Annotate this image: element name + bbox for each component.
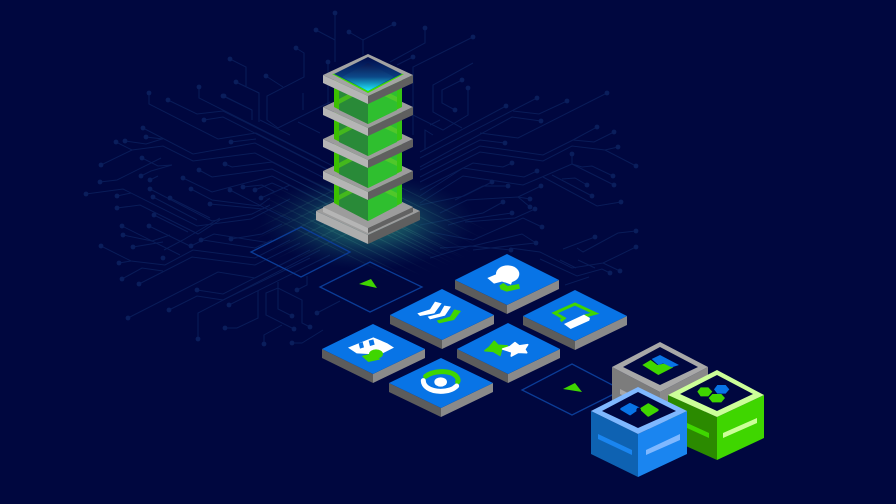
icon: hexagons xyxy=(697,385,729,402)
screen outer xyxy=(334,57,402,91)
slab 3 xyxy=(323,118,413,168)
cube: green xyxy=(668,370,764,460)
screen inner xyxy=(342,63,394,91)
outlined slot with green arrow lower xyxy=(522,364,622,415)
green rim xyxy=(332,70,404,93)
slab 4 xyxy=(323,150,413,200)
grey cube side bar xyxy=(620,389,634,401)
column section 2 xyxy=(334,107,402,156)
green cube left bar xyxy=(687,423,709,438)
tile: chevrons xyxy=(390,289,494,349)
traces: left xyxy=(86,82,368,344)
tile: stars xyxy=(457,323,560,383)
icon: envelope xyxy=(642,355,679,375)
glow light lines xyxy=(264,178,472,270)
outlined slot with green arrow xyxy=(320,262,422,312)
cube: blue xyxy=(591,387,687,477)
icon: puzzle xyxy=(622,404,657,415)
column section 3 xyxy=(334,139,402,188)
column section 4 xyxy=(334,171,402,221)
icon: monitor xyxy=(555,304,595,329)
icon: disk with person xyxy=(348,337,394,362)
tile: monitor xyxy=(523,290,627,350)
arrow: green xyxy=(359,279,377,288)
cube: grey xyxy=(612,342,708,435)
server tower xyxy=(316,54,420,244)
green cube right bar xyxy=(723,418,757,438)
top slab xyxy=(323,54,413,104)
tile: user check xyxy=(455,254,559,314)
blue cube right bar xyxy=(646,434,680,455)
column section 1 xyxy=(334,75,402,124)
illustration xyxy=(84,10,764,477)
base upper tier xyxy=(323,186,413,233)
traces: right xyxy=(420,93,636,285)
circuit board traces xyxy=(84,11,638,346)
trace end dots xyxy=(84,11,638,346)
icon: user xyxy=(487,265,520,292)
icon: ring arrows xyxy=(423,372,458,391)
tile: disk xyxy=(322,324,425,383)
traces: top xyxy=(223,13,473,150)
arrow: green lower xyxy=(563,383,582,392)
outlined empty slot xyxy=(251,227,350,277)
icon: stars xyxy=(485,341,528,356)
icon: chevrons xyxy=(417,302,461,323)
tile: ring xyxy=(389,358,493,417)
slab 2 xyxy=(323,86,413,136)
base lower tier xyxy=(316,187,420,244)
blue cube left bar xyxy=(598,434,632,455)
tower glow xyxy=(260,174,476,270)
